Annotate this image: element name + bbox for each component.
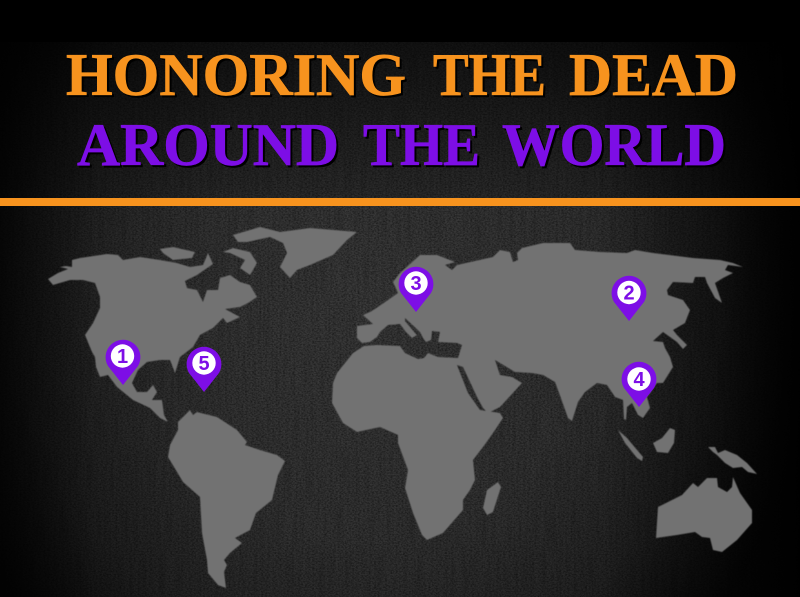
title line 2: WORLD — [502, 112, 726, 178]
pin 5 — [187, 347, 221, 392]
pin 4: 4 — [633, 369, 645, 391]
title line 2: THE — [363, 112, 480, 178]
title line 1: THE — [435, 44, 548, 110]
title line 1 — [66, 42, 740, 110]
title line 2 — [77, 112, 728, 180]
map: Australia — [656, 477, 752, 552]
map: Madagascar — [483, 482, 501, 515]
map: Baffin island — [223, 248, 257, 275]
map: Arctic island west — [160, 247, 195, 260]
title line 1: THE — [433, 42, 546, 108]
world map — [48, 227, 757, 588]
pin 2 — [612, 276, 646, 321]
map: New Guinea — [708, 447, 757, 474]
pin 1 — [106, 340, 140, 385]
pin 3 — [399, 267, 433, 312]
title line 1: DEAD — [569, 42, 738, 108]
title line 2: AROUND — [79, 114, 341, 180]
title line 1: DEAD — [571, 44, 740, 110]
title line 2: WORLD — [504, 114, 728, 180]
pin 4 — [622, 362, 656, 407]
map: Europe, Asia and Africa — [332, 243, 743, 540]
title — [66, 42, 740, 180]
pin 3: 3 — [410, 273, 422, 295]
pin 2: 2 — [623, 282, 635, 304]
title line 2: THE — [365, 114, 482, 180]
title line 1: HONORING — [68, 44, 408, 110]
orange divider — [0, 198, 800, 206]
map: Borneo — [653, 428, 675, 453]
title line 1: HONORING — [66, 42, 406, 108]
title line 2: AROUND — [77, 112, 339, 178]
map: Sumatra — [618, 430, 643, 461]
pin 1: 1 — [117, 346, 128, 368]
map: South America — [168, 410, 285, 588]
map: Greenland — [233, 227, 357, 278]
pin 5: 5 — [198, 353, 210, 375]
map: North and Central America — [48, 253, 257, 422]
